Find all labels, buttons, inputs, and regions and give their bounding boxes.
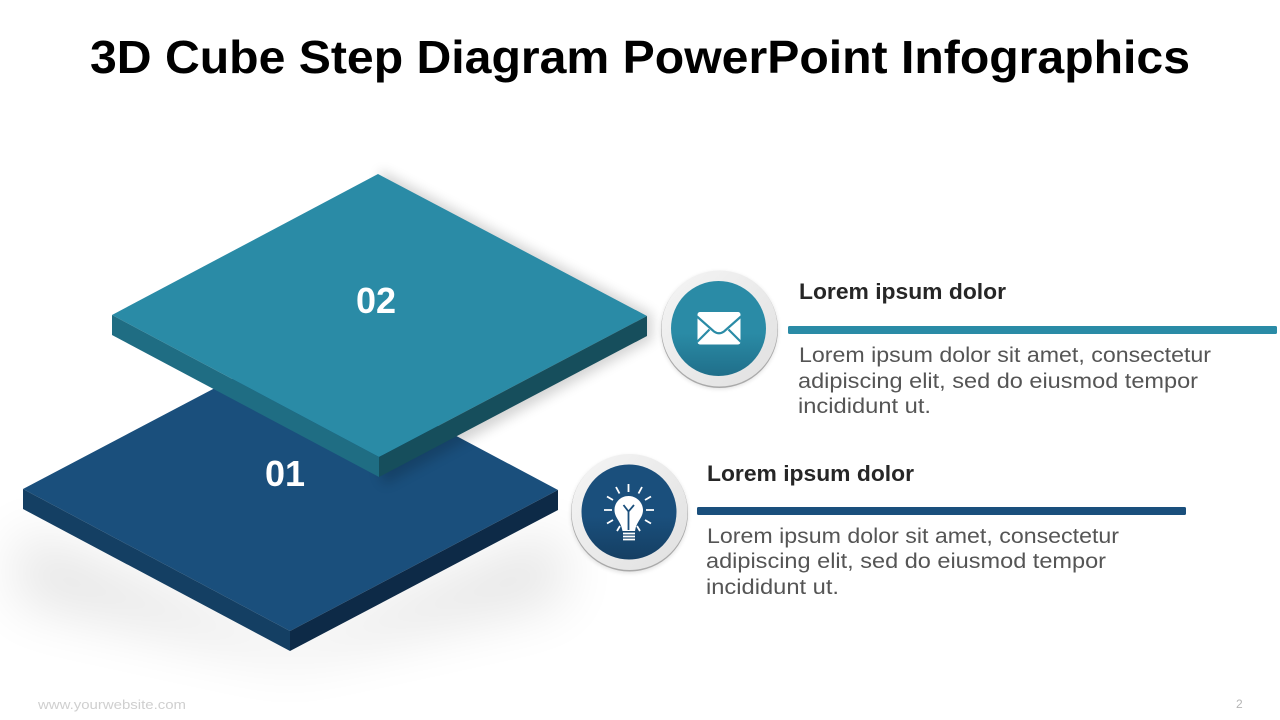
badge: envelope	[661, 270, 778, 389]
divider bar: step 01	[697, 507, 1186, 515]
left face: step 02	[112, 315, 379, 477]
right face: step 02	[379, 316, 647, 477]
body text: step 02	[798, 344, 1211, 418]
title: 3D Cube Step Diagram PowerPoint Infographics	[90, 31, 1190, 83]
icon: envelope	[697, 312, 741, 344]
text block: step 01	[697, 461, 1186, 599]
step 01 plate	[15, 348, 565, 660]
divider bar: step 02	[788, 326, 1277, 334]
text block: step 02	[788, 279, 1277, 418]
badge: light bulb	[571, 454, 688, 573]
right face: step 01	[290, 490, 558, 651]
footer: page number: 2	[1236, 697, 1243, 711]
number: 01: 01	[265, 453, 305, 494]
body text: step 02: Lorem ipsum dolor sit amet, consectetur	[799, 344, 1211, 367]
left face: step 01	[23, 489, 290, 651]
heading: step 02: Lorem ipsum dolor	[799, 279, 1006, 304]
body text: step 01: adipiscing elit, sed do eiusmod tempor	[706, 550, 1106, 573]
body text: step 01: incididunt ut.	[706, 576, 839, 599]
heading: step 01: Lorem ipsum dolor	[707, 461, 914, 486]
top face: step 02	[112, 174, 647, 457]
top face: step 01	[23, 348, 558, 631]
body text: step 01	[706, 525, 1119, 599]
body text: step 02: incididunt ut.	[798, 395, 931, 418]
shadow: step 01	[15, 530, 565, 660]
shadow: step 02	[379, 170, 652, 485]
step 02 plate	[112, 170, 652, 485]
icon: light bulb	[604, 484, 654, 540]
number: 02: 02	[356, 280, 396, 321]
footer: website: www.yourwebsite.com	[37, 697, 186, 712]
body text: step 02: adipiscing elit, sed do eiusmod tempor	[798, 370, 1198, 393]
body text: step 01: Lorem ipsum dolor sit amet, consectetur	[707, 525, 1119, 548]
